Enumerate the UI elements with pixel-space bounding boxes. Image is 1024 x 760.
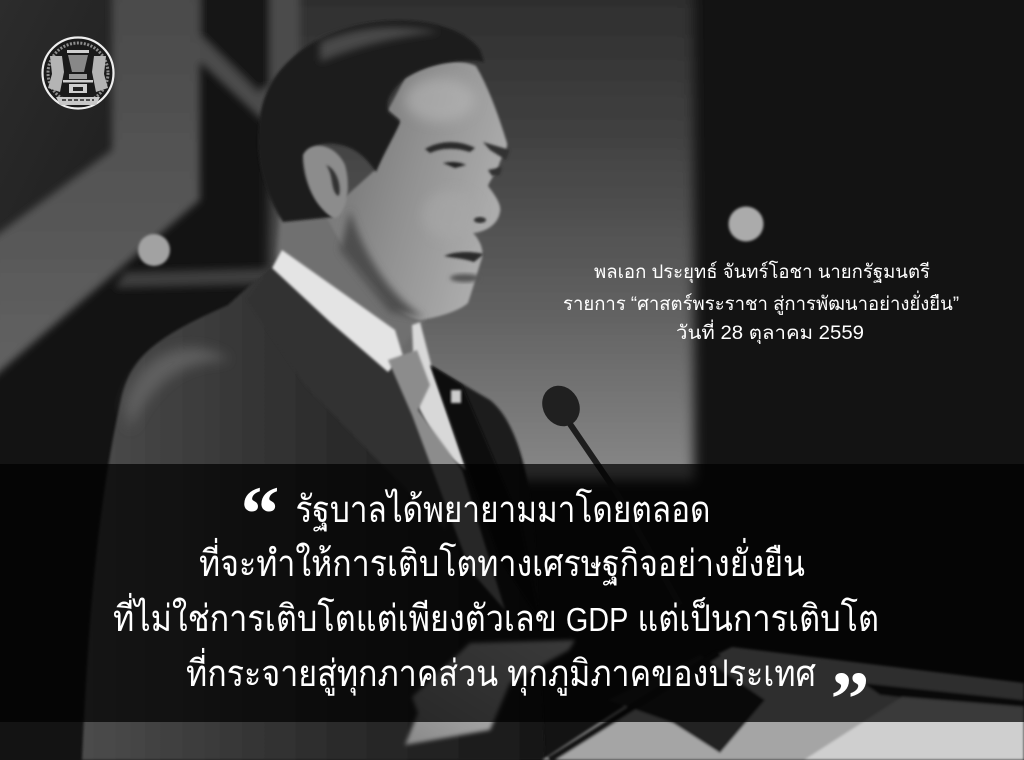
tie — [388, 350, 505, 610]
stage chevron band — [0, 0, 300, 380]
face — [325, 62, 507, 320]
neck — [277, 210, 425, 350]
attribution text — [563, 260, 959, 345]
quotation text: ที่กระจายสู่ทุกภาคส่วน ทุกภูมิภาคของประเทศ — [186, 647, 816, 696]
jaw shading — [340, 210, 425, 318]
hair sheen — [320, 27, 440, 62]
cheek highlight — [422, 191, 478, 239]
royal thai government seal — [42, 38, 114, 108]
opening quote mark: “ — [240, 470, 280, 557]
lectern and papers — [542, 647, 1024, 760]
lower lip shadow — [450, 274, 480, 282]
quotation text: ที่ไม่ใช่การเติบโตแต่เพียงตัวเลข GDP แต่เป็นการเติบโต — [113, 592, 879, 639]
forehead highlight — [405, 78, 475, 122]
quotation text: ที่จะทำให้การเติบโตทางเศรษฐกิจอย่างยั่งยืน — [199, 537, 805, 586]
quotation text — [113, 488, 879, 696]
shirt collar right — [412, 322, 466, 470]
shoulder highlight — [125, 348, 230, 430]
translucent dark quote band — [0, 464, 1024, 722]
attribution text: วันที่ 28 ตุลาคม 2559 — [676, 319, 864, 345]
bokeh lights — [728, 206, 764, 242]
attribution text: พลเอก ประยุทธ์ จันทร์โอชา นายกรัฐมนตรี — [594, 260, 930, 284]
attribution text: รายการ “ศาสตร์พระราชา สู่การพัฒนาอย่างยั่งยืน” — [563, 290, 959, 315]
ear — [303, 146, 348, 218]
hand — [405, 640, 575, 745]
mouth — [444, 252, 484, 262]
suit jacket — [82, 265, 545, 760]
microphone — [535, 379, 680, 605]
eyebrows and eyes — [425, 142, 510, 176]
right lapel — [430, 365, 540, 620]
shirt collar left — [272, 250, 403, 372]
nostril — [474, 217, 486, 223]
hair — [258, 20, 484, 222]
lapel pin — [451, 390, 461, 403]
man in suit — [82, 20, 545, 760]
inner ear shadow — [326, 165, 340, 196]
quotation text: รัฐบาลได้พยายามมาโดยตลอด — [296, 488, 710, 532]
closing quote mark: ” — [830, 655, 870, 742]
left lapel — [247, 266, 465, 530]
